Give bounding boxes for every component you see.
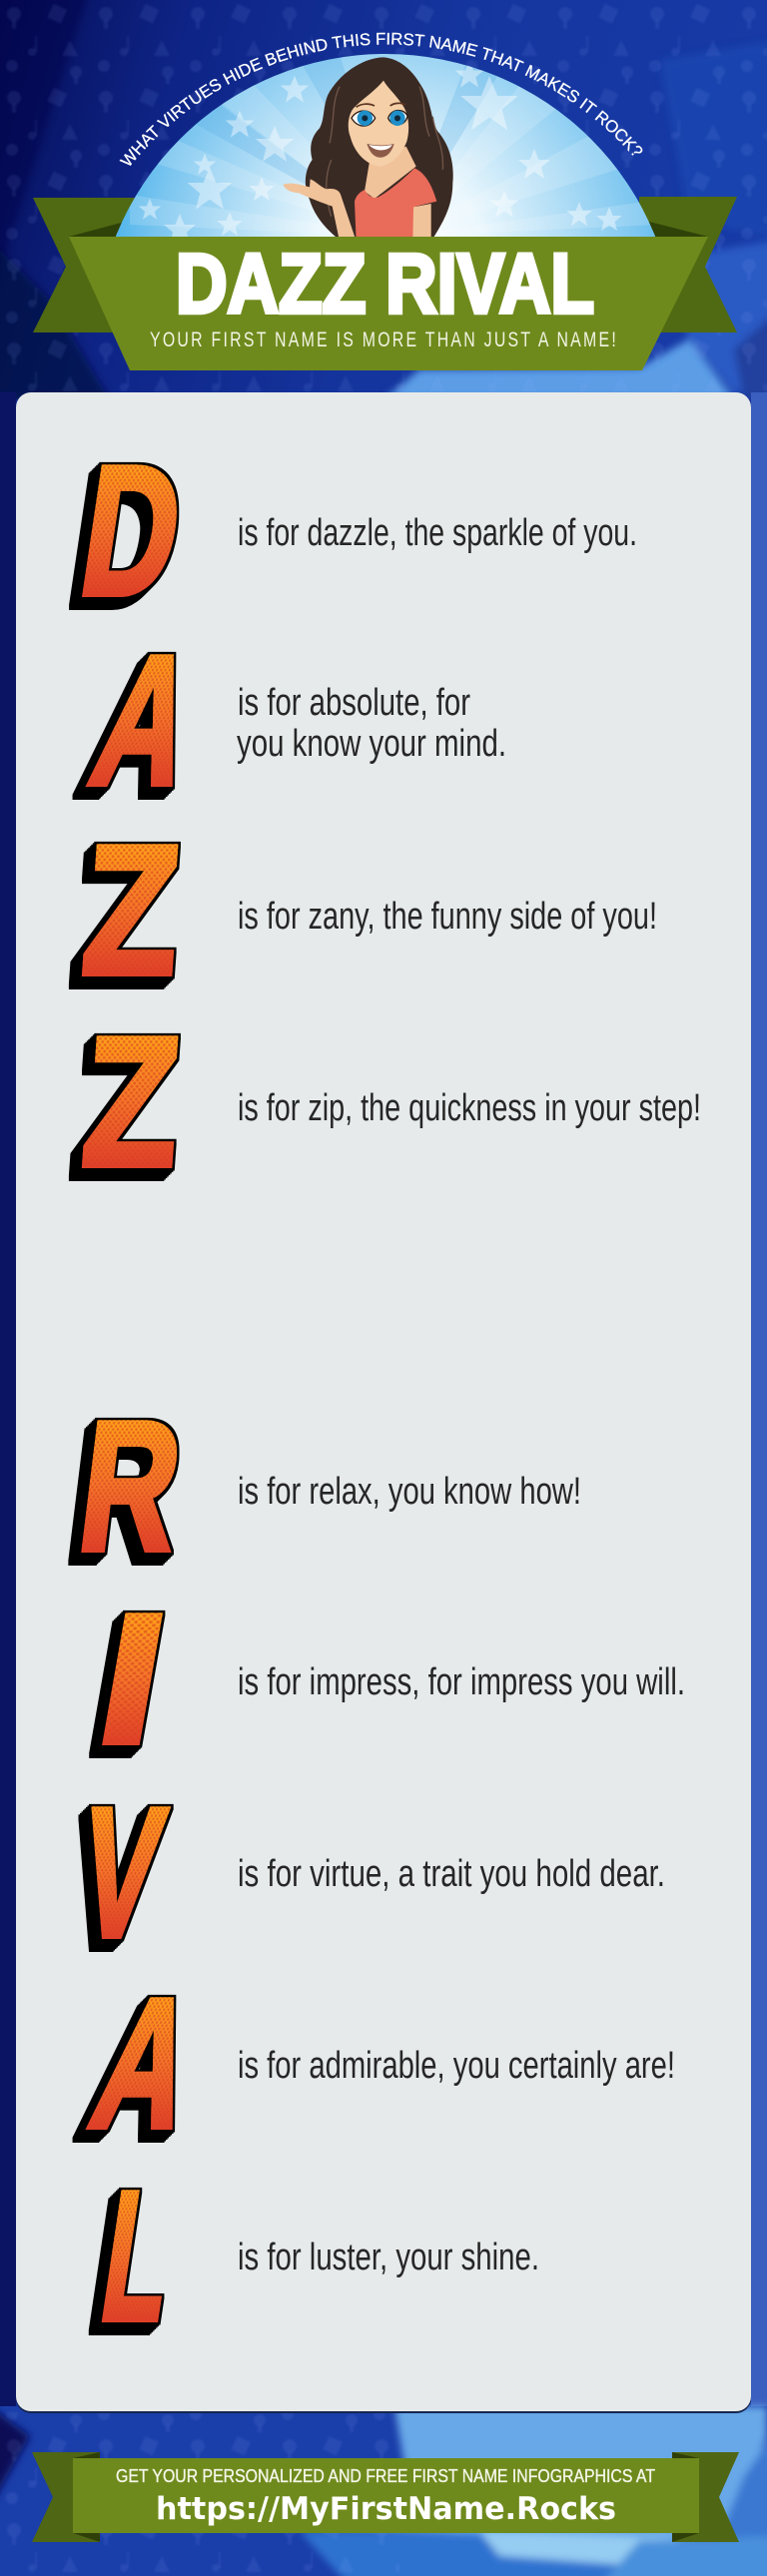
letter D row bbox=[70, 427, 637, 633]
header ribbon: left tail bbox=[33, 198, 135, 332]
subtitle: YOUR FIRST NAME IS MORE THAN JUST A NAME! bbox=[150, 328, 618, 351]
raised hand and arm bbox=[283, 179, 357, 242]
neck and chest bbox=[365, 147, 416, 199]
face bbox=[349, 81, 408, 167]
mouth bbox=[367, 144, 394, 158]
line: absolute: is for absolute, for bbox=[238, 682, 470, 724]
hair bbox=[306, 57, 453, 242]
footer call to action: GET YOUR PERSONALIZED AND FREE FIRST NAME INFOGRAPHICS AT bbox=[116, 2465, 655, 2486]
panel: letters and virtues bbox=[16, 392, 751, 2413]
ribbon fold shadows bbox=[69, 222, 708, 237]
letter Z: Z bbox=[77, 809, 186, 1013]
letter Z: Z bbox=[77, 1000, 186, 1205]
letter L: L bbox=[91, 2154, 185, 2358]
letter V row bbox=[68, 1769, 665, 1975]
letter V: V bbox=[68, 1769, 175, 1975]
shirt bbox=[355, 168, 436, 242]
line: relax: is for relax, you know how! bbox=[238, 1471, 581, 1513]
footer url: https://MyFirstName.Rocks bbox=[156, 2491, 616, 2527]
letter I row bbox=[85, 1577, 685, 1782]
sunburst rays and stars bbox=[130, 58, 650, 237]
header main band bbox=[69, 237, 708, 370]
eyes bbox=[352, 103, 407, 126]
letter A: A bbox=[76, 1961, 215, 2166]
illustration dome bbox=[116, 54, 655, 237]
footer band bbox=[73, 2458, 699, 2533]
letter D: D bbox=[70, 427, 194, 633]
letter Z row bbox=[77, 809, 657, 1013]
letter I: I bbox=[85, 1577, 180, 1782]
title: DAZZ RIVAL bbox=[176, 237, 594, 330]
letter A row bbox=[76, 618, 506, 823]
line: know your mind: you know your mind. bbox=[237, 723, 506, 765]
character bbox=[283, 57, 453, 242]
letter A: A bbox=[76, 618, 215, 823]
letter R row bbox=[70, 1384, 581, 1590]
letter L row bbox=[91, 2154, 539, 2358]
footer ribbon bbox=[32, 2452, 739, 2542]
footer right tail bbox=[672, 2452, 739, 2542]
letter R: R bbox=[70, 1384, 191, 1590]
letter A row two bbox=[76, 1961, 675, 2166]
arched heading: WHAT VIRTUES HIDE BEHIND THIS FIRST NAME THAT MAKES IT ROCK? bbox=[120, 32, 643, 166]
right arm bbox=[412, 204, 431, 242]
line: dazzle: is for dazzle, the sparkle of you. bbox=[238, 512, 637, 554]
line: luster: is for luster, your shine. bbox=[238, 2237, 539, 2278]
footer left tail bbox=[32, 2452, 100, 2542]
second letter Z row bbox=[77, 1000, 701, 1205]
header ribbon: right tail bbox=[639, 197, 737, 332]
